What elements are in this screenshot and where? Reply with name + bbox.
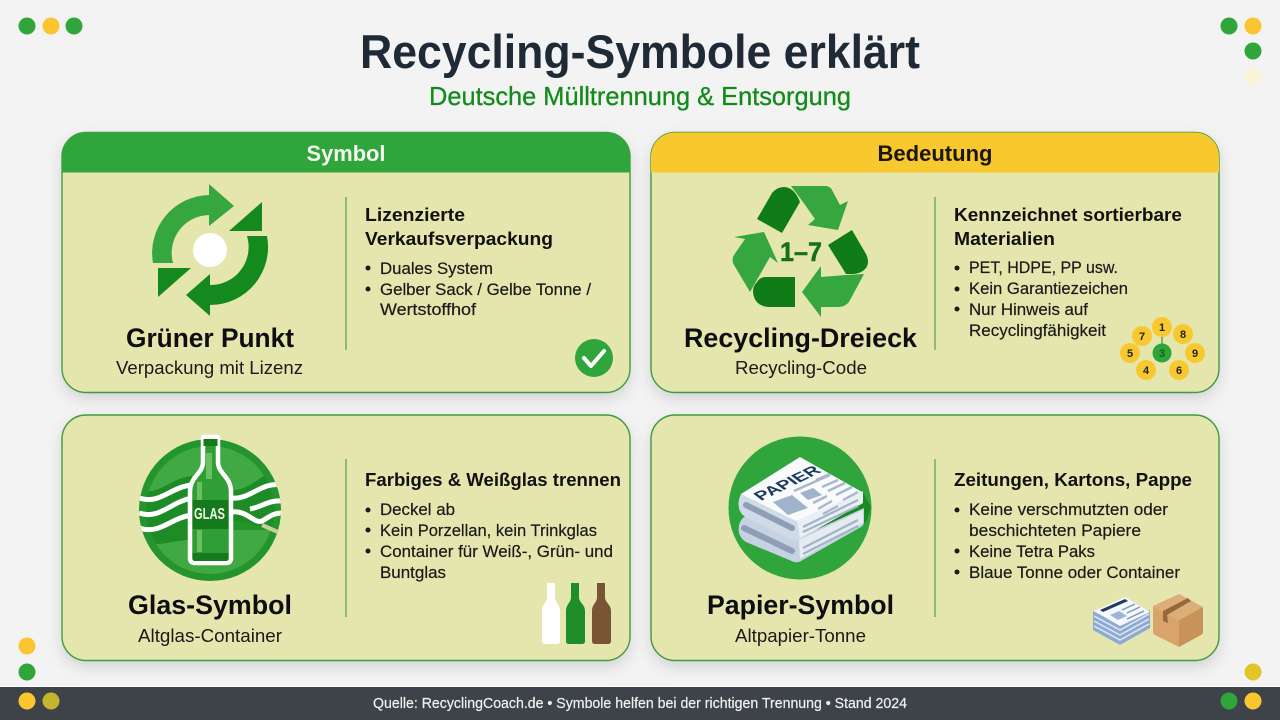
header: Bedeutung [651, 132, 1219, 172]
footer bar [0, 686, 1280, 720]
text block: Lizenzierte Verkaufsverpackung [365, 204, 591, 319]
text block: Farbiges & Weißglas trennen: Container für Weiß-, Grün- und [380, 543, 613, 561]
text block: Kennzeichnet sortierbare Materialien: Nur Hinweis auf [969, 301, 1088, 319]
footer text: Quelle: RecyclingCoach.de • Symbole helfen bei der richtigen Trennung • Stand 2024 [373, 696, 907, 712]
caption: Recycling-Code [735, 357, 867, 378]
text block: Kennzeichnet sortierbare Materialien: PET, HDPE, PP usw. [969, 259, 1118, 277]
icon: newspaper [728, 436, 872, 580]
icon: number circles: 8 [1180, 329, 1186, 341]
icon: glass bottle: GLAS [194, 506, 225, 523]
text block: Lizenzierte Verkaufsverpackung: Duales System [380, 260, 493, 278]
decorative dot: bottom right [1244, 664, 1262, 680]
icon: three bottles [542, 583, 611, 644]
caption: Altpapier-Tonne [735, 625, 866, 646]
panel: Papier-Symbol [651, 415, 1219, 660]
icon: number circles: 5 [1127, 348, 1133, 360]
icon: Grüner Punkt [152, 184, 268, 316]
text block: Zeitungen, Kartons, Pappe: beschichteten Papiere [969, 522, 1141, 540]
text block: Kennzeichnet sortierbare Materialien: Kein Garantiezeichen [969, 280, 1128, 298]
header: Symbol: Symbol [306, 141, 386, 166]
icon: number circles: 4 [1143, 365, 1150, 377]
header: Bedeutung: Bedeutung [878, 141, 992, 166]
decorative dots: top right [1220, 18, 1262, 84]
icon: check mark [575, 339, 613, 377]
text block: Lizenzierte Verkaufsverpackung: Wertstoffhof [380, 301, 476, 319]
text block: Farbiges & Weißglas trennen [365, 469, 621, 582]
label: Papier-Symbol: Papier-Symbol [707, 590, 894, 620]
footer dots [18, 692, 1262, 710]
subtitle: Deutsche Mülltrennung & Entsorgung [429, 81, 851, 111]
text block: Farbiges & Weißglas trennen: Kein Porzellan, kein Trinkglas [380, 522, 597, 540]
panel: Glas-Symbol [62, 415, 630, 660]
text block: Farbiges & Weißglas trennen: Buntglas [380, 564, 446, 582]
icon: newspaper: PAPIER [749, 462, 826, 503]
icon: small newspaper stack [1093, 597, 1150, 645]
icon: number circles: 7 [1139, 331, 1145, 343]
text block: Farbiges & Weißglas trennen: Deckel ab [380, 501, 455, 519]
text block: Zeitungen, Kartons, Pappe [954, 469, 1192, 582]
icon: recycling triangle [732, 186, 868, 317]
icon: recycling triangle: 1–7 [780, 237, 822, 267]
text block: Farbiges & Weißglas trennen: Farbiges & Weißglas trennen [365, 469, 621, 490]
text block: Lizenzierte Verkaufsverpackung: Verkaufsverpackung [365, 228, 553, 249]
text block: Zeitungen, Kartons, Pappe: Keine verschmutzten oder [969, 501, 1169, 519]
text block: Zeitungen, Kartons, Pappe: Keine Tetra Paks [969, 543, 1095, 561]
text block: Kennzeichnet sortierbare Materialien: Recyclingfähigkeit [969, 322, 1106, 340]
header: Symbol [62, 132, 630, 172]
top sheet [741, 457, 862, 521]
text block: Lizenzierte Verkaufsverpackung: Gelber Sack / Gelbe Tonne / [380, 281, 591, 299]
text block: Kennzeichnet sortierbare Materialien [954, 204, 1182, 340]
icon: cardboard box [1153, 594, 1203, 647]
icon: number circles: 1 [1159, 322, 1165, 334]
icon: number circles: 9 [1192, 348, 1198, 360]
caption: Altglas-Container [138, 625, 282, 646]
text block: Kennzeichnet sortierbare Materialien: Materialien [954, 228, 1055, 249]
panel: Recycling-Dreieck [651, 132, 1219, 392]
text block: Kennzeichnet sortierbare Materialien: Kennzeichnet sortierbare [954, 204, 1182, 225]
icon: number circles: 3 [1159, 348, 1165, 360]
lower fold [739, 508, 864, 562]
panel: Grüner Punkt [62, 132, 630, 392]
text block: Zeitungen, Kartons, Pappe: Zeitungen, Kartons, Pappe [954, 469, 1192, 490]
upper fold [738, 491, 863, 540]
text block: Zeitungen, Kartons, Pappe: Blaue Tonne oder Container [969, 564, 1181, 582]
label: Grüner Punkt: Grüner Punkt [126, 323, 294, 353]
icon: number circles: 6 [1176, 365, 1182, 377]
label: Glas-Symbol: Glas-Symbol [128, 590, 292, 620]
decorative dots: bottom left [18, 638, 36, 680]
title: Recycling-Symbole erklärt [360, 25, 920, 78]
icon: glass bottle [139, 437, 282, 581]
text block: Lizenzierte Verkaufsverpackung: Lizenzierte [365, 204, 465, 225]
caption: Verpackung mit Lizenz [116, 357, 303, 378]
label: Recycling-Dreieck: Recycling-Dreieck [684, 323, 917, 353]
icon: number circles [1120, 317, 1205, 380]
decorative dots: top left [18, 18, 82, 34]
